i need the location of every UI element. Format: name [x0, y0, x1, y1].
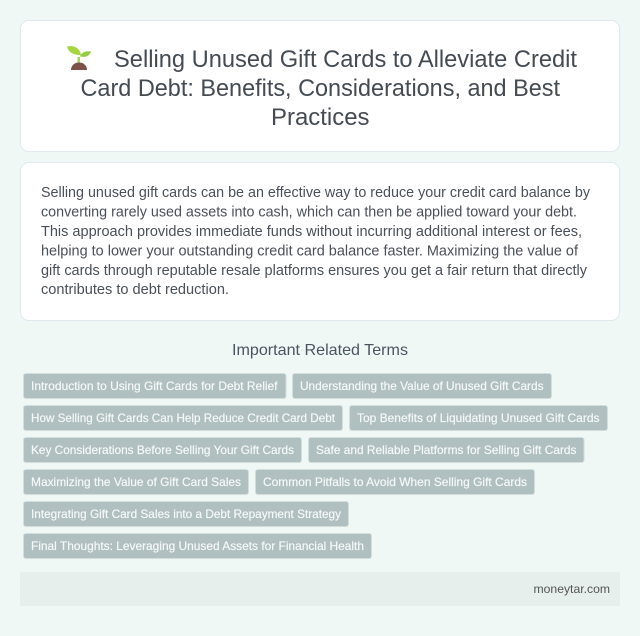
- tag: integrating sales: Integrating Gift Card Sales into a Debt Repayment Strategy: [31, 507, 341, 521]
- tag: introduction: Introduction to Using Gift Cards for Debt Relief: [31, 379, 278, 393]
- summary paragraph: [41, 185, 591, 298]
- summary paragraph: This approach provides immediate funds without incurring additional interest or fees,: [41, 224, 582, 240]
- summary paragraph: helping to lower your outstanding credit card balance faster. Maximizing the value of: [41, 244, 579, 260]
- tag: introduction: [24, 374, 286, 398]
- footer: [20, 572, 620, 606]
- tag: final thoughts: [24, 534, 372, 558]
- footer: moneytar.com: [534, 582, 610, 596]
- summary paragraph: contributes to debt reduction.: [41, 282, 229, 298]
- tag: maximizing value: [24, 470, 248, 494]
- tag: understanding value: Understanding the Value of Unused Gift Cards: [300, 379, 544, 393]
- tag: top benefits: [350, 406, 608, 430]
- tag: key considerations: Key Considerations Before Selling Your Gift Cards: [31, 443, 294, 457]
- tag: final thoughts: Final Thoughts: Leveraging Unused Assets for Financial Health: [31, 539, 364, 553]
- panel: title card: [20, 20, 620, 152]
- summary paragraph: Selling unused gift cards can be an effective way to reduce your credit card balance by: [41, 185, 591, 201]
- heading: important related terms: Important Related Terms: [232, 342, 408, 359]
- tag: common pitfalls: Common Pitfalls to Avoid When Selling Gift Cards: [263, 475, 527, 489]
- title: Selling Unused Gift Cards to Alleviate Credit: [114, 46, 577, 73]
- tag: top benefits: Top Benefits of Liquidating Unused Gift Cards: [357, 411, 600, 425]
- tag: safe platforms: Safe and Reliable Platforms for Selling Gift Cards: [316, 443, 576, 457]
- tag: how selling helps: How Selling Gift Cards Can Help Reduce Credit Card Debt: [31, 411, 336, 425]
- tag: integrating sales: [24, 502, 348, 526]
- summary paragraph: gift cards through reputable resale platforms ensures you get a fair return that directly: [41, 263, 588, 279]
- tag: how selling helps: [24, 406, 342, 430]
- tag list: [24, 374, 608, 558]
- tag: common pitfalls: [256, 470, 534, 494]
- title: [80, 46, 577, 131]
- tag: maximizing value: Maximizing the Value of Gift Card Sales: [31, 475, 241, 489]
- title: Card Debt: Benefits, Considerations, and Best: [80, 75, 560, 102]
- tag: key considerations: [24, 438, 302, 462]
- icon: seedling: [67, 46, 91, 70]
- tag: understanding value: [292, 374, 552, 398]
- summary paragraph: converting rarely used assets into cash, which can then be applied toward your debt.: [41, 204, 577, 220]
- panel: summary card: [20, 162, 620, 320]
- tag: safe platforms: [308, 438, 584, 462]
- title: Practices: [271, 104, 370, 131]
